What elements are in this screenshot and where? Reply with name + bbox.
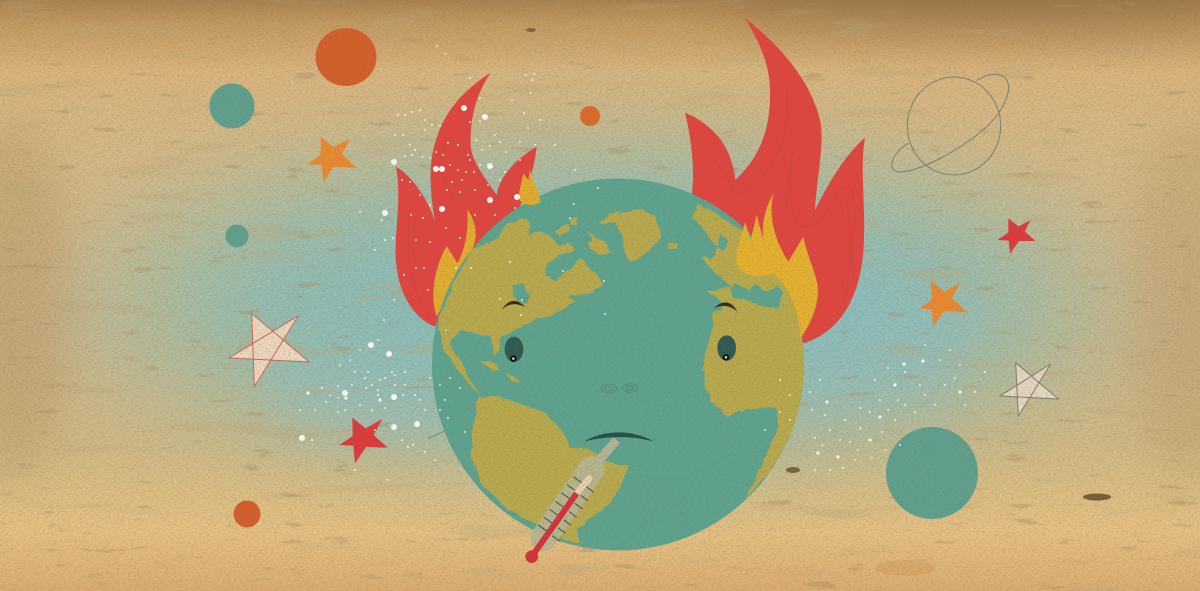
planet: teal upper left bbox=[210, 84, 254, 128]
flame contour lines bbox=[408, 90, 853, 320]
ocean blotches bbox=[633, 500, 677, 520]
flame: left yellow bbox=[433, 209, 476, 317]
inland seas bbox=[452, 233, 783, 360]
face bbox=[428, 301, 737, 563]
north america bbox=[438, 218, 605, 397]
star: cream outlined right bbox=[1000, 363, 1058, 416]
small sparkles bbox=[300, 46, 985, 480]
nose bbox=[601, 384, 637, 393]
flame: right red bbox=[685, 18, 865, 343]
south america bbox=[472, 397, 628, 543]
star: cream outlined left bbox=[229, 313, 309, 387]
star: gold upper left bbox=[307, 137, 357, 183]
right eye bbox=[717, 335, 736, 361]
planet: orange large bbox=[316, 28, 376, 86]
arctic islands bbox=[555, 212, 620, 255]
ringed planet outline bbox=[892, 74, 1009, 175]
planet: small orange bbox=[580, 106, 600, 126]
globe bbox=[432, 178, 810, 550]
africa and indian coast bbox=[703, 305, 810, 500]
left eye bbox=[505, 337, 523, 362]
thermometer bbox=[525, 440, 617, 563]
flame: left red bbox=[396, 73, 537, 327]
flame: small yellow on globe top bbox=[518, 170, 541, 205]
medium sparkles bbox=[308, 361, 960, 457]
stray needle bbox=[428, 431, 445, 439]
ocean bbox=[432, 178, 804, 550]
star: orange right bbox=[919, 281, 967, 327]
greenland bbox=[613, 208, 662, 262]
right eyebrow bbox=[714, 302, 737, 312]
white sparkle dust bbox=[300, 46, 985, 480]
flames behind the globe bbox=[396, 18, 865, 343]
planet: orange lower left bbox=[234, 500, 260, 528]
iceland bbox=[667, 243, 678, 250]
eurasia bbox=[692, 204, 807, 370]
star: red lower left bbox=[339, 418, 388, 463]
mouth bbox=[584, 432, 654, 442]
large sparkles bbox=[302, 108, 517, 438]
flame: right yellow over globe bbox=[736, 193, 818, 338]
planet: small teal bbox=[226, 224, 248, 248]
left eyebrow bbox=[502, 301, 525, 310]
continents bbox=[438, 204, 810, 543]
planet: large teal bbox=[886, 427, 978, 519]
caribbean islands bbox=[479, 359, 521, 383]
star: red right bbox=[997, 218, 1036, 254]
